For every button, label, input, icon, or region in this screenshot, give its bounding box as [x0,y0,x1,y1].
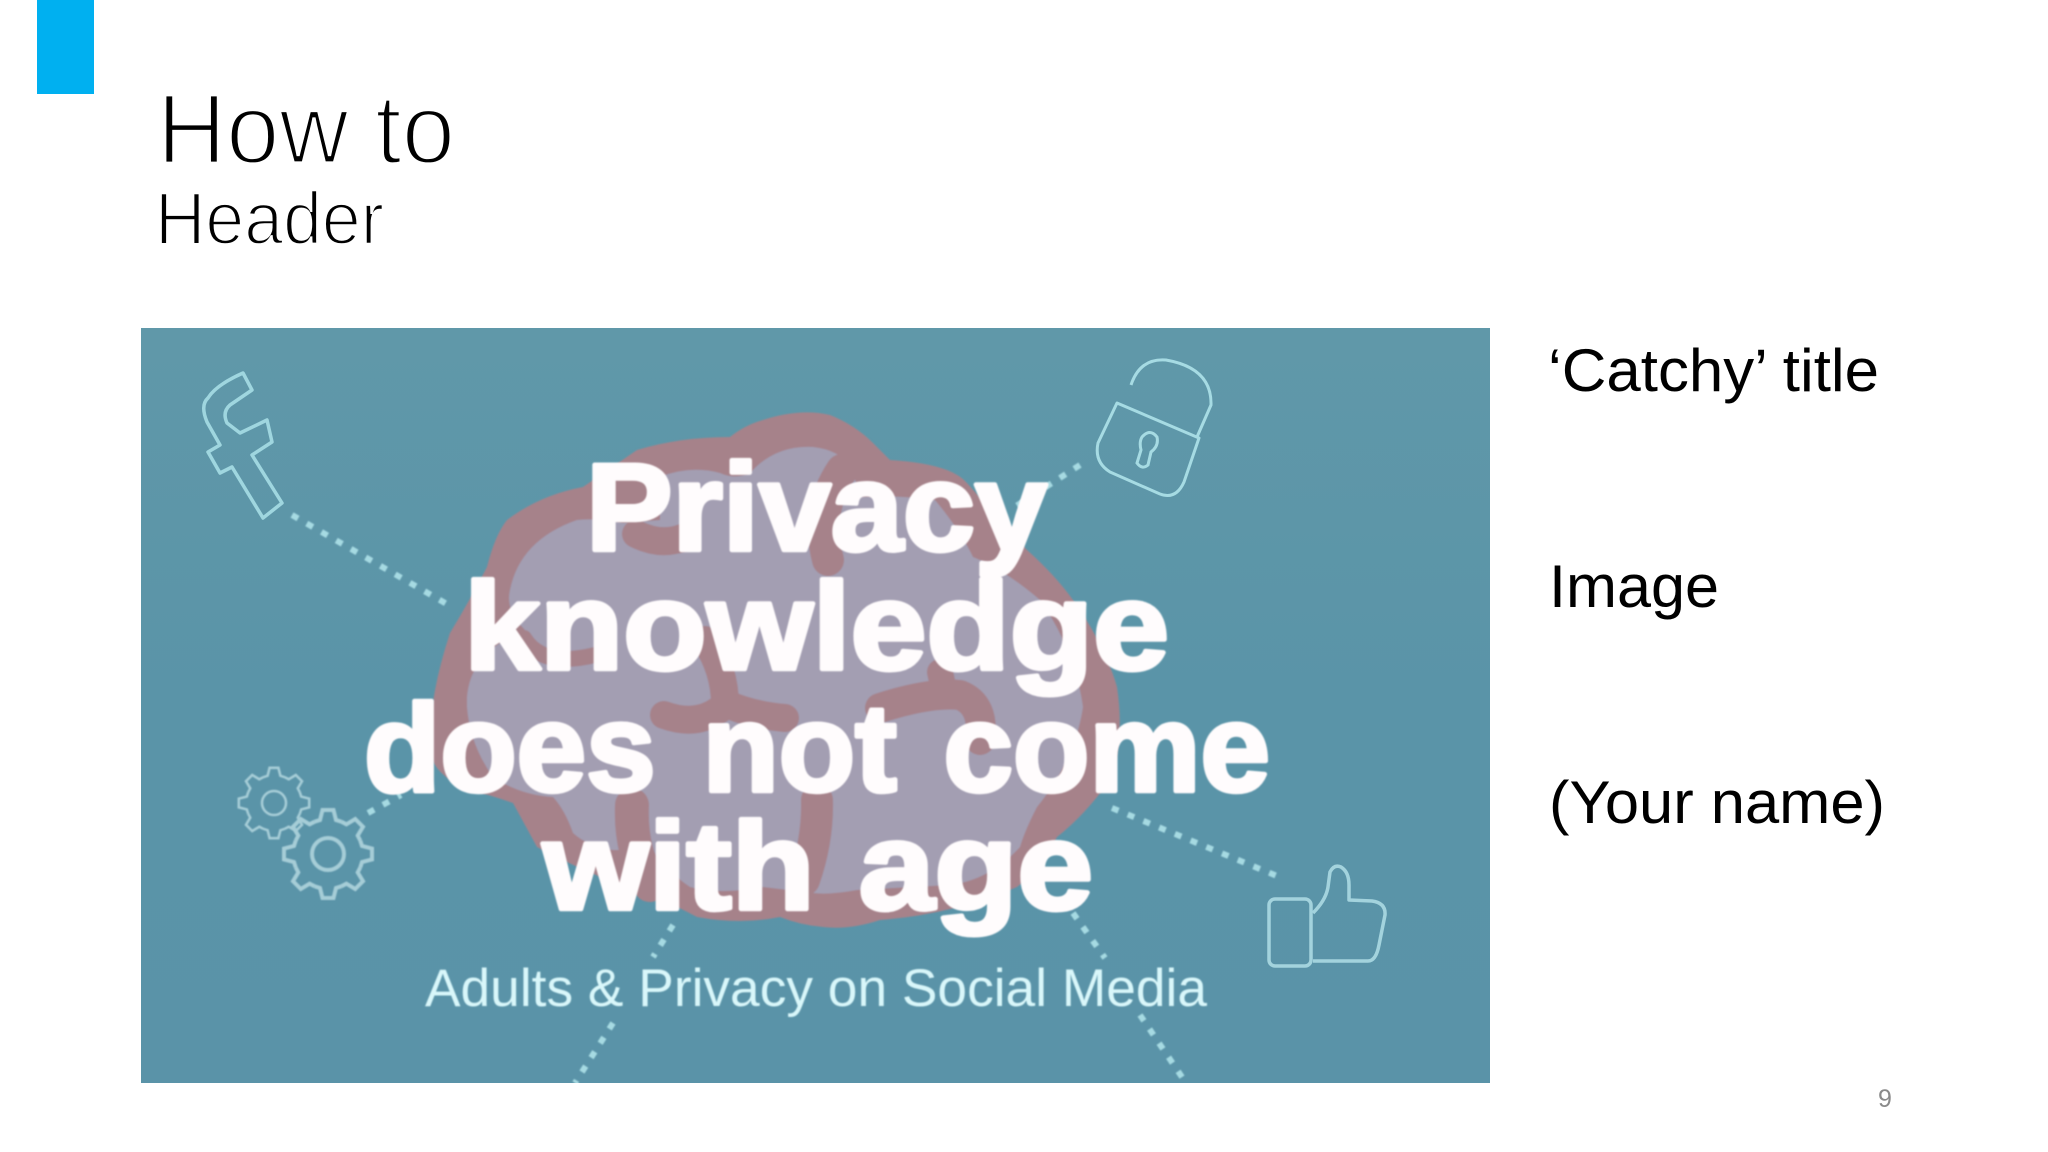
list item: your name: (Your name) [1549,769,1885,836]
image subtitle: Adults & Privacy on Social Media [425,959,1208,1018]
page number: 9 [1878,1085,1892,1113]
accent block [37,0,94,94]
illustration: brain [430,412,1120,928]
subheading: Header: Header [155,177,384,260]
panel: example image [141,328,1490,1083]
icon: facebook f [204,373,282,518]
icon: padlock [1097,360,1211,496]
image background [141,328,1490,1083]
small gear [239,768,309,838]
title line 2: knowledge [464,558,1169,696]
dotted connector lines [292,465,1277,1083]
title line 3: does not come [364,680,1270,818]
icon: gears [239,768,372,898]
title line 4: with age [542,798,1093,936]
thumb cuff [1269,899,1311,966]
heading: How to: How to [157,73,455,184]
thumb hand [1313,866,1385,961]
padlock body [1097,403,1199,496]
large gear [284,810,372,898]
title line 1: Privacy [586,439,1047,577]
icon: thumbs up [1269,866,1385,966]
brain inner lobes [467,447,1083,894]
padlock keyhole [1137,432,1157,467]
brain folds [524,470,981,885]
padlock shackle [1131,360,1211,437]
image title [364,439,1270,936]
list item: image: Image [1549,553,1719,620]
list item: catchy title: ‘Catchy’ title [1548,337,1879,404]
brain outer shape [430,412,1120,928]
